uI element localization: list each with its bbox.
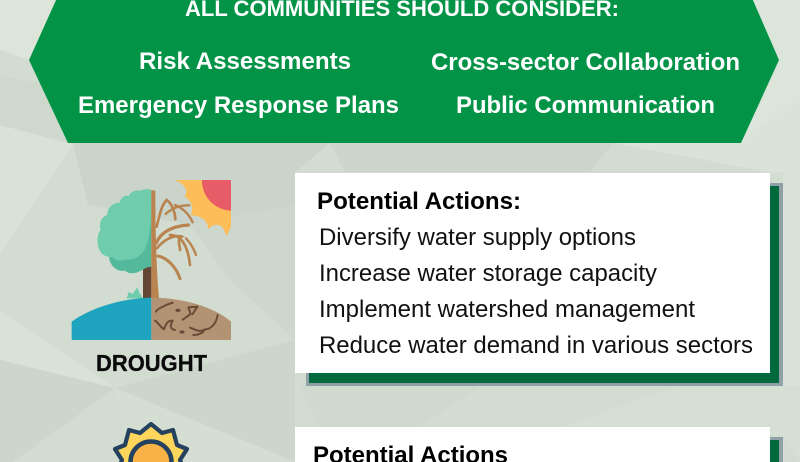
header banner [29,0,779,143]
panel: second actions [295,427,783,462]
action list: Implement watershed management [319,296,695,323]
icon: ground water half [72,298,151,340]
item: risk assessments: Risk Assessments [139,48,351,75]
item: cross-sector collaboration: Cross-sector Collaboration [431,49,740,76]
icon: sun (extreme heat) [115,424,187,462]
action list: Increase water storage capacity [319,260,657,287]
panel heading: Potential Actions: [317,188,521,215]
action list: Diversify water supply options [319,224,636,251]
action list [319,224,753,359]
item: emergency response plans: Emergency Response Plans [78,92,399,119]
panel shadow [306,437,783,462]
action list: Reduce water demand in various sectors [319,332,753,359]
icon: green tree half [97,189,151,298]
icon: dead tree half [151,190,196,298]
panel card [295,173,770,373]
icon: sun [174,180,231,236]
panel card [295,427,770,462]
item: public communication: Public Communication [456,92,715,119]
panel: drought actions [295,173,783,386]
icon: drought tree and sun [72,180,231,340]
icon: cracked soil half [151,298,231,340]
label: drought: DROUGHT [96,350,207,376]
panel shadow [306,183,783,386]
